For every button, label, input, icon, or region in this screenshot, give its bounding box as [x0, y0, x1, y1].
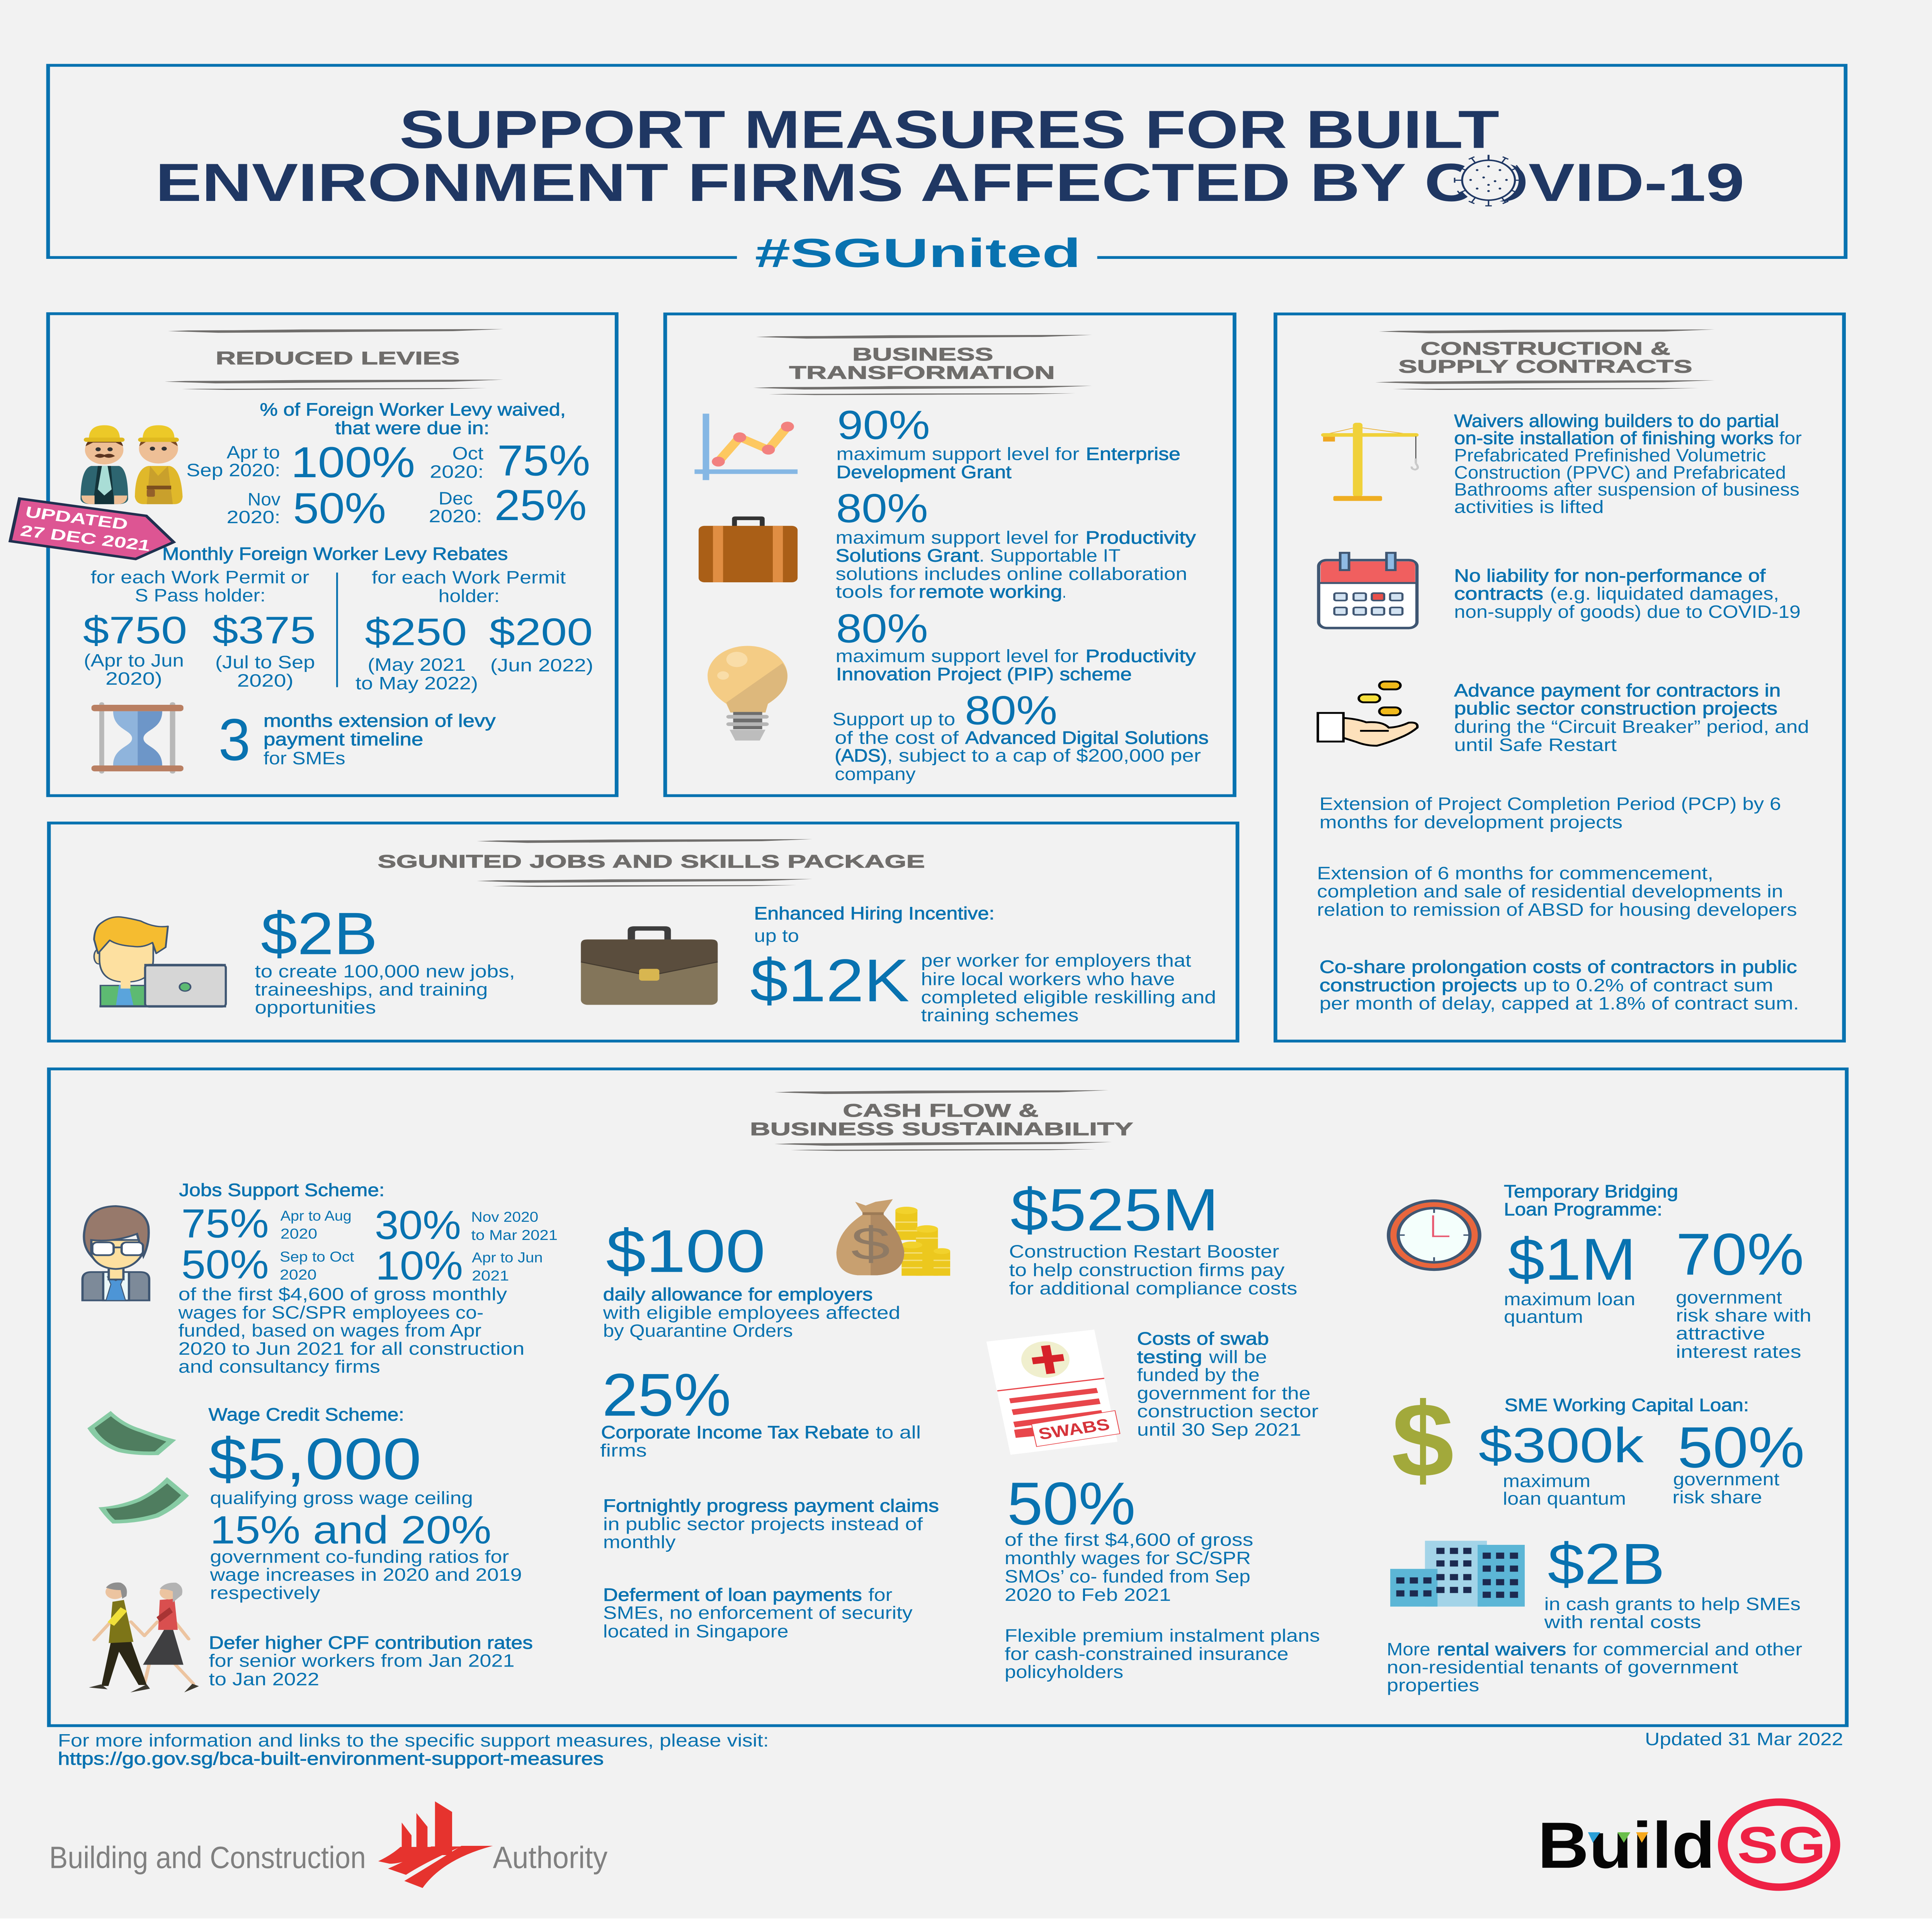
- advance payment text: [1454, 680, 1809, 755]
- levy extension: [218, 707, 496, 773]
- jobs support scheme: Sep to Oct: [280, 1249, 354, 1265]
- rental waivers text: [1387, 1639, 1802, 1695]
- cash grants stat: [1544, 1532, 1801, 1632]
- jobs support scheme: [178, 1180, 558, 1377]
- waiver percentages: 2020:: [429, 506, 482, 526]
- rental waivers text: rental waivers: [1437, 1639, 1566, 1659]
- productivity solutions grant: [835, 486, 1196, 602]
- wage credit scheme: wage increases in 2020 and 2019: [209, 1565, 522, 1585]
- logo: buildsg: [1537, 1802, 1835, 1887]
- loan deferment text: SMEs, no enforcement of security: [603, 1603, 913, 1623]
- waiver heading: % of Foreign Worker Levy waived,: [260, 400, 566, 420]
- cash grants stat: with rental costs: [1544, 1612, 1701, 1632]
- jobs support scheme: Nov 2020: [471, 1209, 538, 1225]
- no liability text: non-supply of goods) due to COVID-19: [1454, 602, 1801, 622]
- no liability text: No liability for non-performance of: [1454, 566, 1766, 586]
- rebates: work permit: holder:: [439, 586, 500, 606]
- jobs support scheme: 2020 to Jun 2021 for all construction: [179, 1338, 524, 1359]
- heading: cash flow: [750, 1090, 1133, 1151]
- rebates: work permit: (May 2021: [367, 655, 466, 675]
- jobs stat: opportunities: [255, 997, 376, 1017]
- daily allowance stat: $100: [606, 1217, 765, 1285]
- icon: swab document: [986, 1330, 1120, 1455]
- prolongation costs text: [1320, 957, 1799, 1014]
- wage credit scheme: qualifying gross wage ceiling: [210, 1488, 473, 1508]
- rebates: work permit: to May 2022): [355, 673, 478, 693]
- waiver percentages: 75%: [497, 436, 590, 485]
- header panel: [48, 65, 1845, 276]
- advanced digital solutions: Support up to: [832, 709, 955, 729]
- icon: person at laptop: [94, 917, 226, 1007]
- cash grants stat: in cash grants to help SMEs: [1544, 1594, 1801, 1614]
- updated ribbon callout: 27 DEC 2021: [19, 522, 152, 554]
- productivity solutions grant: maximum support level for: [835, 527, 1078, 548]
- sme working capital loan: loan quantum: [1503, 1488, 1626, 1509]
- smo wages stat: SMOs’ co- funded from Sep: [1005, 1566, 1250, 1587]
- advanced digital solutions: [832, 688, 1209, 784]
- advanced digital solutions: (ADS): [835, 745, 887, 765]
- rebates: work permit or s pass: 2020): [105, 668, 162, 689]
- wage credit scheme: $5,000: [209, 1426, 422, 1492]
- no liability text: (e.g. liquidated damages,: [1550, 583, 1779, 604]
- heading: sgunited jobs and skills package: [378, 839, 925, 887]
- advance payment text: until Safe Restart: [1454, 735, 1617, 755]
- temporary bridging loan: $1M: [1508, 1226, 1636, 1293]
- rebates: work permit or s pass: $750: [83, 609, 187, 651]
- daily allowance stat: daily allowance for employers: [603, 1284, 873, 1304]
- loan deferment text: for: [868, 1585, 892, 1605]
- productivity innovation project: Innovation Project (PIP) scheme: [836, 664, 1132, 684]
- restart booster stat: [1009, 1177, 1297, 1298]
- title: SUPPORT MEASURES FOR BUILT: [400, 100, 1499, 160]
- hiring incentive stat: training schemes: [921, 1005, 1079, 1025]
- rebates: work permit or s pass: S Pass holder:: [135, 585, 265, 605]
- heading: business transformation: [753, 335, 1092, 395]
- daily allowance stat: [603, 1217, 900, 1341]
- waivers text: Bathrooms after suspension of business: [1454, 480, 1799, 500]
- logo: building and construction authority: Building and Construction: [49, 1840, 366, 1874]
- icon: brown briefcase: [581, 926, 718, 1005]
- icon: money bag and coins: [837, 1199, 950, 1276]
- swab testing text: Costs of swab: [1137, 1328, 1269, 1349]
- update date: Updated 31 Mar 2022: [1645, 1729, 1843, 1749]
- tax rebate stat: to all: [876, 1422, 921, 1442]
- temporary bridging loan: Loan Programme:: [1504, 1199, 1662, 1219]
- icon: swab document: SWABS: [1037, 1415, 1112, 1443]
- hiring incentive stat: [750, 903, 1216, 1025]
- jobs stat: $2B: [261, 900, 378, 967]
- absd remission text: completion and sale of residential developments in: [1317, 881, 1783, 901]
- cpf rates text: for senior workers from Jan 2021: [209, 1651, 515, 1671]
- waiver percentages: Nov: [248, 489, 281, 509]
- jobs support scheme: 75%: [181, 1201, 269, 1247]
- footer note: [58, 1730, 769, 1769]
- swab testing text: [1137, 1328, 1318, 1440]
- productivity solutions grant: 80%: [836, 486, 928, 531]
- waiver percentages: Apr to: [226, 442, 280, 463]
- waiver percentages: 50%: [293, 484, 386, 532]
- waivers text: Waivers allowing builders to do partial: [1454, 411, 1779, 431]
- sme working capital loan: 50%: [1677, 1415, 1804, 1480]
- smo wages stat: of the first $4,600 of gross: [1005, 1530, 1253, 1550]
- productivity solutions grant: solutions includes online collaboration: [835, 564, 1187, 584]
- smo wages stat: 2020 to Feb 2021: [1005, 1585, 1171, 1605]
- swab testing text: will be: [1209, 1347, 1267, 1367]
- jobs stat: traineeships, and training: [255, 980, 488, 1000]
- advance payment text: Advance payment for contractors in: [1454, 680, 1781, 701]
- updated ribbon callout: [10, 498, 173, 559]
- temporary bridging loan: government: [1676, 1287, 1782, 1308]
- swab testing text: funded by the: [1137, 1365, 1260, 1385]
- heading: business transformation: TRANSFORMATION: [789, 362, 1055, 383]
- waiver heading: that were due in:: [335, 418, 490, 438]
- jobs support scheme: 50%: [181, 1242, 269, 1287]
- sme working capital loan: SME Working Capital Loan:: [1505, 1395, 1749, 1415]
- prolongation costs text: up to 0.2% of contract sum: [1524, 975, 1773, 995]
- tax rebate stat: 25%: [602, 1361, 731, 1429]
- prolongation costs text: Co-share prolongation costs of contractors in public: [1320, 957, 1797, 977]
- heading: sgunited jobs and skills package: SGUNITED JOBS AND SKILLS PACKAGE: [378, 851, 925, 872]
- logo: building and construction authority: Authority: [493, 1840, 607, 1874]
- icon: hourglass: [92, 702, 184, 774]
- progress payment text: [603, 1496, 939, 1552]
- enterprise development grant: Development Grant: [837, 462, 1012, 482]
- jobs support scheme: 30%: [375, 1202, 461, 1248]
- jobs support scheme: 2021: [472, 1268, 509, 1284]
- productivity innovation project: Productivity: [1085, 646, 1196, 666]
- premium plans text: policyholders: [1005, 1662, 1123, 1682]
- icon: virus: [1455, 155, 1522, 206]
- heading: cash flow: CASH FLOW &: [843, 1100, 1039, 1121]
- rebates: work permit: $200: [489, 611, 593, 653]
- jobs support scheme: Apr to Jun: [472, 1250, 543, 1265]
- jobs support scheme: funded, based on wages from Apr: [179, 1320, 481, 1340]
- waiver percentages: 25%: [494, 481, 587, 529]
- icon: calendar: [1319, 553, 1417, 628]
- rental waivers text: non-residential tenants of government: [1387, 1657, 1738, 1677]
- panel: sgunited jobs and skills package: [49, 823, 1238, 1041]
- cpf rates text: Defer higher CPF contribution rates: [209, 1633, 533, 1653]
- progress payment text: in public sector projects instead of: [603, 1514, 923, 1534]
- productivity solutions grant: Productivity: [1085, 527, 1196, 548]
- jobs support scheme: wages for SC/SPR employees co-: [178, 1303, 483, 1323]
- jobs support scheme: 2020: [281, 1226, 317, 1242]
- wage credit scheme: 15% and 20%: [210, 1508, 492, 1552]
- waivers text: [1454, 411, 1802, 517]
- temporary bridging loan: Temporary Bridging: [1504, 1181, 1678, 1201]
- icon: money bag and coins: $: [851, 1218, 890, 1270]
- rebates: work permit or s pass: 2020): [237, 670, 293, 690]
- sme working capital loan: maximum: [1503, 1471, 1590, 1491]
- icon: hand with coins: [1318, 682, 1417, 746]
- wage credit scheme: Wage Credit Scheme:: [209, 1405, 404, 1425]
- jobs stat: [255, 900, 515, 1017]
- waiver percentages: Dec: [439, 488, 473, 509]
- productivity solutions grant: remote working: [919, 582, 1062, 602]
- rental waivers text: More: [1387, 1639, 1430, 1659]
- waiver heading: [260, 400, 566, 438]
- swab testing text: government for the: [1137, 1383, 1311, 1403]
- title: ENVIRONMENT FIRMS AFFECTED BY COVID-19: [155, 153, 1745, 213]
- waiver percentages: 2020:: [226, 507, 281, 527]
- advance payment text: during the “Circuit Breaker” period, and: [1454, 717, 1809, 737]
- enterprise development grant: Enterprise: [1086, 444, 1180, 464]
- project completion text: months for development projects: [1320, 812, 1622, 832]
- absd remission text: Extension of 6 months for commencement,: [1317, 863, 1713, 883]
- rebates: work permit: (Jun 2022): [490, 655, 593, 675]
- tax rebate stat: Corporate Income Tax Rebate: [601, 1422, 869, 1442]
- heading: reduced levies: [165, 329, 503, 390]
- hiring incentive stat: up to: [754, 926, 799, 946]
- jobs support scheme: of the first $4,600 of gross monthly: [179, 1284, 507, 1304]
- hiring incentive stat: per worker for employers that: [921, 950, 1191, 971]
- sme working capital loan: government: [1673, 1469, 1779, 1489]
- premium plans text: [1005, 1626, 1320, 1682]
- heading: construction and supply contracts: [1375, 330, 1714, 390]
- footer note: For more information and links to the specific support measures, please visit:: [58, 1730, 769, 1750]
- sme working capital loan: risk share: [1672, 1487, 1762, 1507]
- productivity innovation project: 80%: [836, 606, 928, 651]
- restart booster stat: $525M: [1010, 1177, 1219, 1243]
- levy extension: for SMEs: [264, 748, 345, 768]
- rebates: work permit: $250: [365, 611, 467, 653]
- productivity solutions grant: Solutions Grant: [835, 546, 979, 566]
- productivity innovation project: maximum support level for: [835, 646, 1078, 666]
- waivers text: Prefabricated Prefinished Volumetric: [1454, 445, 1766, 465]
- updated ribbon callout: UPDATED: [24, 503, 129, 533]
- temporary bridging loan: maximum loan: [1504, 1289, 1635, 1309]
- advanced digital solutions: of the cost of: [835, 728, 959, 748]
- title: [155, 100, 1745, 213]
- temporary bridging loan: risk share with: [1676, 1305, 1811, 1325]
- temporary bridging loan: 70%: [1676, 1221, 1804, 1287]
- enterprise development grant: [837, 402, 1180, 482]
- waivers text: activities is lifted: [1454, 497, 1604, 517]
- no liability text: contracts: [1454, 583, 1543, 604]
- premium plans text: for cash-constrained insurance: [1005, 1644, 1289, 1664]
- loan deferment text: located in Singapore: [603, 1621, 789, 1641]
- jobs support scheme: 10%: [376, 1243, 463, 1289]
- waivers text: Construction (PPVC) and Prefabricated: [1454, 463, 1786, 483]
- smo wages stat: monthly wages for SC/SPR: [1005, 1548, 1251, 1568]
- sme working capital loan: [1479, 1395, 1804, 1509]
- waivers text: on-site installation of finishing works: [1454, 428, 1774, 448]
- premium plans text: Flexible premium instalment plans: [1005, 1626, 1320, 1646]
- jobs support scheme: 2020: [280, 1267, 316, 1283]
- hiring incentive stat: completed eligible reskilling and: [921, 987, 1216, 1007]
- absd remission text: relation to remission of ABSD for housing developers: [1317, 900, 1797, 920]
- panel: construction and supply contracts: [1276, 314, 1844, 1041]
- temporary bridging loan: interest rates: [1676, 1342, 1801, 1362]
- icon: light bulb: [707, 646, 787, 741]
- rental waivers text: properties: [1387, 1675, 1479, 1695]
- logo: buildsg: SG: [1737, 1816, 1826, 1874]
- jobs stat: to create 100,000 new jobs,: [255, 961, 515, 981]
- tax rebate stat: firms: [600, 1440, 647, 1461]
- hiring incentive stat: hire local workers who have: [921, 969, 1175, 989]
- icon: crane: [1321, 423, 1418, 501]
- cpf rates text: [209, 1633, 533, 1689]
- icon: banknotes: [87, 1411, 189, 1524]
- rebates: work permit or s pass: (Jul to Sep: [215, 652, 315, 672]
- absd remission text: [1317, 863, 1797, 920]
- icon: line chart: [694, 414, 798, 480]
- waiver percentages: Sep 2020:: [186, 460, 281, 480]
- jobs support scheme: to Mar 2021: [471, 1227, 558, 1243]
- productivity innovation project: [835, 606, 1196, 684]
- temporary bridging loan: attractive: [1676, 1323, 1765, 1344]
- levy extension: payment timeline: [264, 729, 423, 749]
- hiring incentive stat: $12K: [750, 947, 910, 1014]
- advanced digital solutions: , subject to a cap of $200,000 per: [887, 745, 1201, 765]
- panel: cash flow and business sustainability: [49, 1069, 1847, 1726]
- project completion text: [1320, 794, 1781, 832]
- progress payment text: Fortnightly progress payment claims: [603, 1496, 939, 1516]
- wage credit scheme: [209, 1405, 522, 1603]
- icon: suitcase: [699, 517, 798, 582]
- swab testing text: until 30 Sep 2021: [1137, 1420, 1301, 1440]
- waiver percentages: Oct: [452, 443, 483, 463]
- enterprise development grant: 90%: [837, 402, 930, 448]
- heading: construction and supply contracts: CONSTRUCTION &: [1420, 338, 1670, 359]
- prolongation costs text: per month of delay, capped at 1.8% of contract sum.: [1320, 993, 1799, 1014]
- restart booster stat: for additional compliance costs: [1009, 1278, 1297, 1298]
- waiver percentages: 100%: [291, 438, 415, 486]
- levy extension: 3: [218, 707, 250, 773]
- icon: buildings: [1390, 1541, 1525, 1607]
- icon: senior couple walking: [89, 1582, 199, 1692]
- jobs support scheme: and consultancy firms: [179, 1357, 380, 1377]
- heading: reduced levies: REDUCED LEVIES: [216, 348, 460, 368]
- tax rebate stat: [600, 1361, 921, 1461]
- restart booster stat: to help construction firms pay: [1009, 1260, 1285, 1280]
- smo wages stat: [1005, 1469, 1253, 1605]
- heading: business transformation: BUSINESS: [852, 344, 993, 364]
- logo: building and construction authority: [49, 1801, 607, 1888]
- hashtag: #SGUnited: [755, 230, 1081, 276]
- productivity solutions grant: tools for: [835, 582, 915, 602]
- rebates: work permit or s pass: $375: [213, 609, 316, 651]
- no liability text: [1454, 566, 1801, 622]
- wage credit scheme: respectively: [210, 1583, 320, 1603]
- heading: cash flow: BUSINESS SUSTAINABILITY: [750, 1119, 1133, 1139]
- advanced digital solutions: 80%: [965, 688, 1057, 733]
- waiver percentages: [186, 436, 590, 532]
- panel: reduced levies: [48, 314, 617, 796]
- temporary bridging loan: [1504, 1181, 1811, 1362]
- daily allowance stat: with eligible employees affected: [603, 1303, 900, 1323]
- rebates: work permit: [355, 567, 593, 693]
- progress payment text: monthly: [603, 1532, 676, 1552]
- loan deferment text: [603, 1585, 913, 1641]
- rental waivers text: for commercial and other: [1573, 1639, 1802, 1659]
- footer note: https://go.gov.sg/bca-built-environment-support-measures: [58, 1748, 604, 1769]
- waivers text: for: [1779, 428, 1802, 448]
- logo: buildsg: Build: [1537, 1809, 1715, 1882]
- project completion text: Extension of Project Completion Period (PCP) by 6: [1320, 794, 1781, 814]
- rebates heading: Monthly Foreign Worker Levy Rebates: [162, 544, 508, 564]
- icon: construction workers: [80, 425, 183, 504]
- loan deferment text: Deferment of loan payments: [603, 1585, 862, 1605]
- icon: clock: [1387, 1199, 1481, 1271]
- panel: business transformation: [665, 314, 1235, 796]
- advanced digital solutions: Advanced Digital Solutions: [965, 728, 1209, 748]
- icon: dollar sign: $: [1391, 1381, 1454, 1499]
- heading: construction and supply contracts: SUPPLY CONTRACTS: [1398, 356, 1692, 377]
- restart booster stat: Construction Restart Booster: [1009, 1242, 1279, 1262]
- enterprise development grant: maximum support level for: [837, 444, 1079, 464]
- swab testing text: construction sector: [1137, 1401, 1318, 1421]
- jobs support scheme: Apr to Aug: [281, 1208, 352, 1224]
- wage credit scheme: government co-funding ratios for: [210, 1546, 509, 1567]
- cpf rates text: to Jan 2022: [209, 1669, 319, 1689]
- smo wages stat: 50%: [1007, 1469, 1136, 1537]
- levy extension: months extension of levy: [264, 711, 496, 731]
- swab testing text: testing: [1137, 1347, 1202, 1367]
- advanced digital solutions: company: [835, 764, 916, 784]
- temporary bridging loan: quantum: [1504, 1307, 1583, 1327]
- advance payment text: public sector construction projects: [1454, 698, 1777, 718]
- icon: man with glasses: [83, 1206, 149, 1300]
- rebates: work permit: for each Work Permit: [372, 567, 566, 587]
- sme working capital loan: $300k: [1479, 1418, 1644, 1473]
- rebates: work permit or s pass: for each Work Permit or: [91, 567, 309, 587]
- cash grants stat: $2B: [1548, 1532, 1665, 1597]
- rebates: work permit or s pass: [83, 567, 316, 690]
- productivity solutions grant: .: [1062, 582, 1066, 602]
- productivity solutions grant: . Supportable IT: [979, 546, 1121, 566]
- waiver percentages: 2020:: [430, 462, 484, 482]
- hiring incentive stat: Enhanced Hiring Incentive:: [754, 903, 995, 923]
- prolongation costs text: construction projects: [1320, 975, 1517, 995]
- jobs support scheme: Jobs Support Scheme:: [179, 1180, 384, 1200]
- daily allowance stat: by Quarantine Orders: [603, 1321, 793, 1341]
- rebates: work permit or s pass: (Apr to Jun: [84, 650, 184, 670]
